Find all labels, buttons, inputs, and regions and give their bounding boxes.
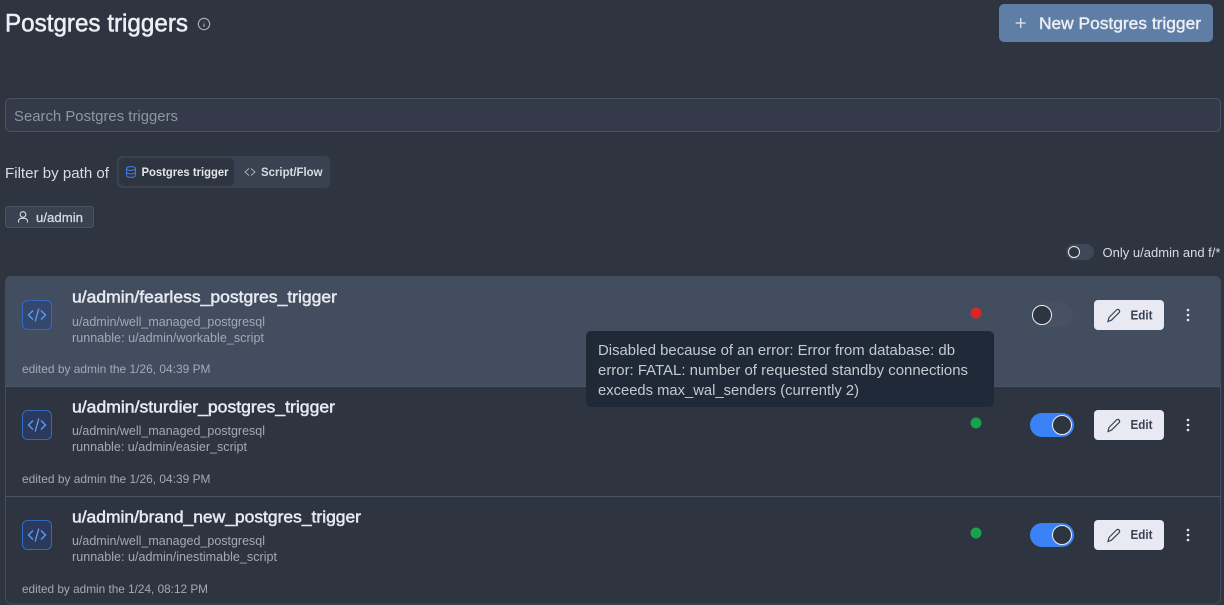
error tooltip: Disabled because of an error: Error from database: db: [598, 343, 955, 359]
row 1: runnable: u/admin/workable_script: [72, 331, 265, 345]
row 2: runnable: u/admin/easier_script: [72, 440, 248, 454]
filter toggle group: [117, 156, 330, 188]
edit button: Edit: [1130, 418, 1153, 432]
filter toggle group: Script/Flow: [261, 167, 323, 179]
edit button: Edit: [1130, 308, 1153, 322]
row 3: [22, 508, 1189, 596]
row 3: u/admin/well_managed_postgresql: [72, 534, 265, 548]
owner toggle: [1066, 244, 1221, 260]
icon: more menu: [1187, 419, 1189, 431]
row 2: u/admin/sturdier_postgres_trigger: [72, 398, 336, 416]
toggle on: [1030, 523, 1074, 547]
row 1: [5, 276, 1221, 386]
filter label: Filter by path of: [5, 166, 110, 182]
search input: [6, 98, 1220, 132]
icon: code tile: [22, 520, 52, 550]
row 2: [5, 398, 1221, 496]
new trigger button: [999, 4, 1213, 42]
edit button: [1094, 410, 1164, 440]
owner toggle: Only u/admin and f/*: [1102, 246, 1221, 260]
row 1: u/admin/well_managed_postgresql: [72, 315, 265, 329]
row 2: edited by admin the 1/26, 04:39 PM: [22, 472, 210, 486]
filter toggle group: Postgres trigger: [142, 167, 229, 179]
path chip: u/admin: [36, 210, 83, 225]
edit button: [1094, 520, 1164, 550]
toggle on: [1030, 413, 1074, 437]
icon: code: [245, 168, 255, 176]
icon: database: [126, 167, 136, 177]
search input: Search Postgres triggers: [14, 109, 178, 125]
icon: more menu: [1187, 309, 1189, 321]
edit button: Edit: [1130, 528, 1153, 542]
trigger list: [5, 276, 1221, 604]
row 3: runnable: u/admin/inestimable_script: [72, 550, 278, 564]
title: Postgres triggers: [5, 10, 188, 38]
error tooltip: exceeds max_wal_senders (currently 2): [598, 383, 859, 399]
error tooltip: [586, 331, 994, 407]
row 1: u/admin/fearless_postgres_trigger: [72, 288, 338, 306]
edit button: [1094, 300, 1164, 330]
icon: more menu: [1187, 529, 1189, 541]
toggle off: [1032, 303, 1073, 327]
icon: code tile: [22, 300, 52, 330]
error tooltip: error: FATAL: number of requested standby connections: [598, 363, 968, 379]
row 3: u/admin/brand_new_postgres_trigger: [72, 508, 362, 526]
row 1: edited by admin the 1/26, 04:39 PM: [22, 362, 210, 376]
icon: code tile: [22, 410, 52, 440]
row 2: u/admin/well_managed_postgresql: [72, 424, 265, 438]
icon: info: [198, 18, 210, 30]
path chip: [6, 206, 94, 228]
row 3: edited by admin the 1/24, 08:12 PM: [22, 582, 208, 596]
new trigger button: New Postgres trigger: [1039, 15, 1202, 33]
